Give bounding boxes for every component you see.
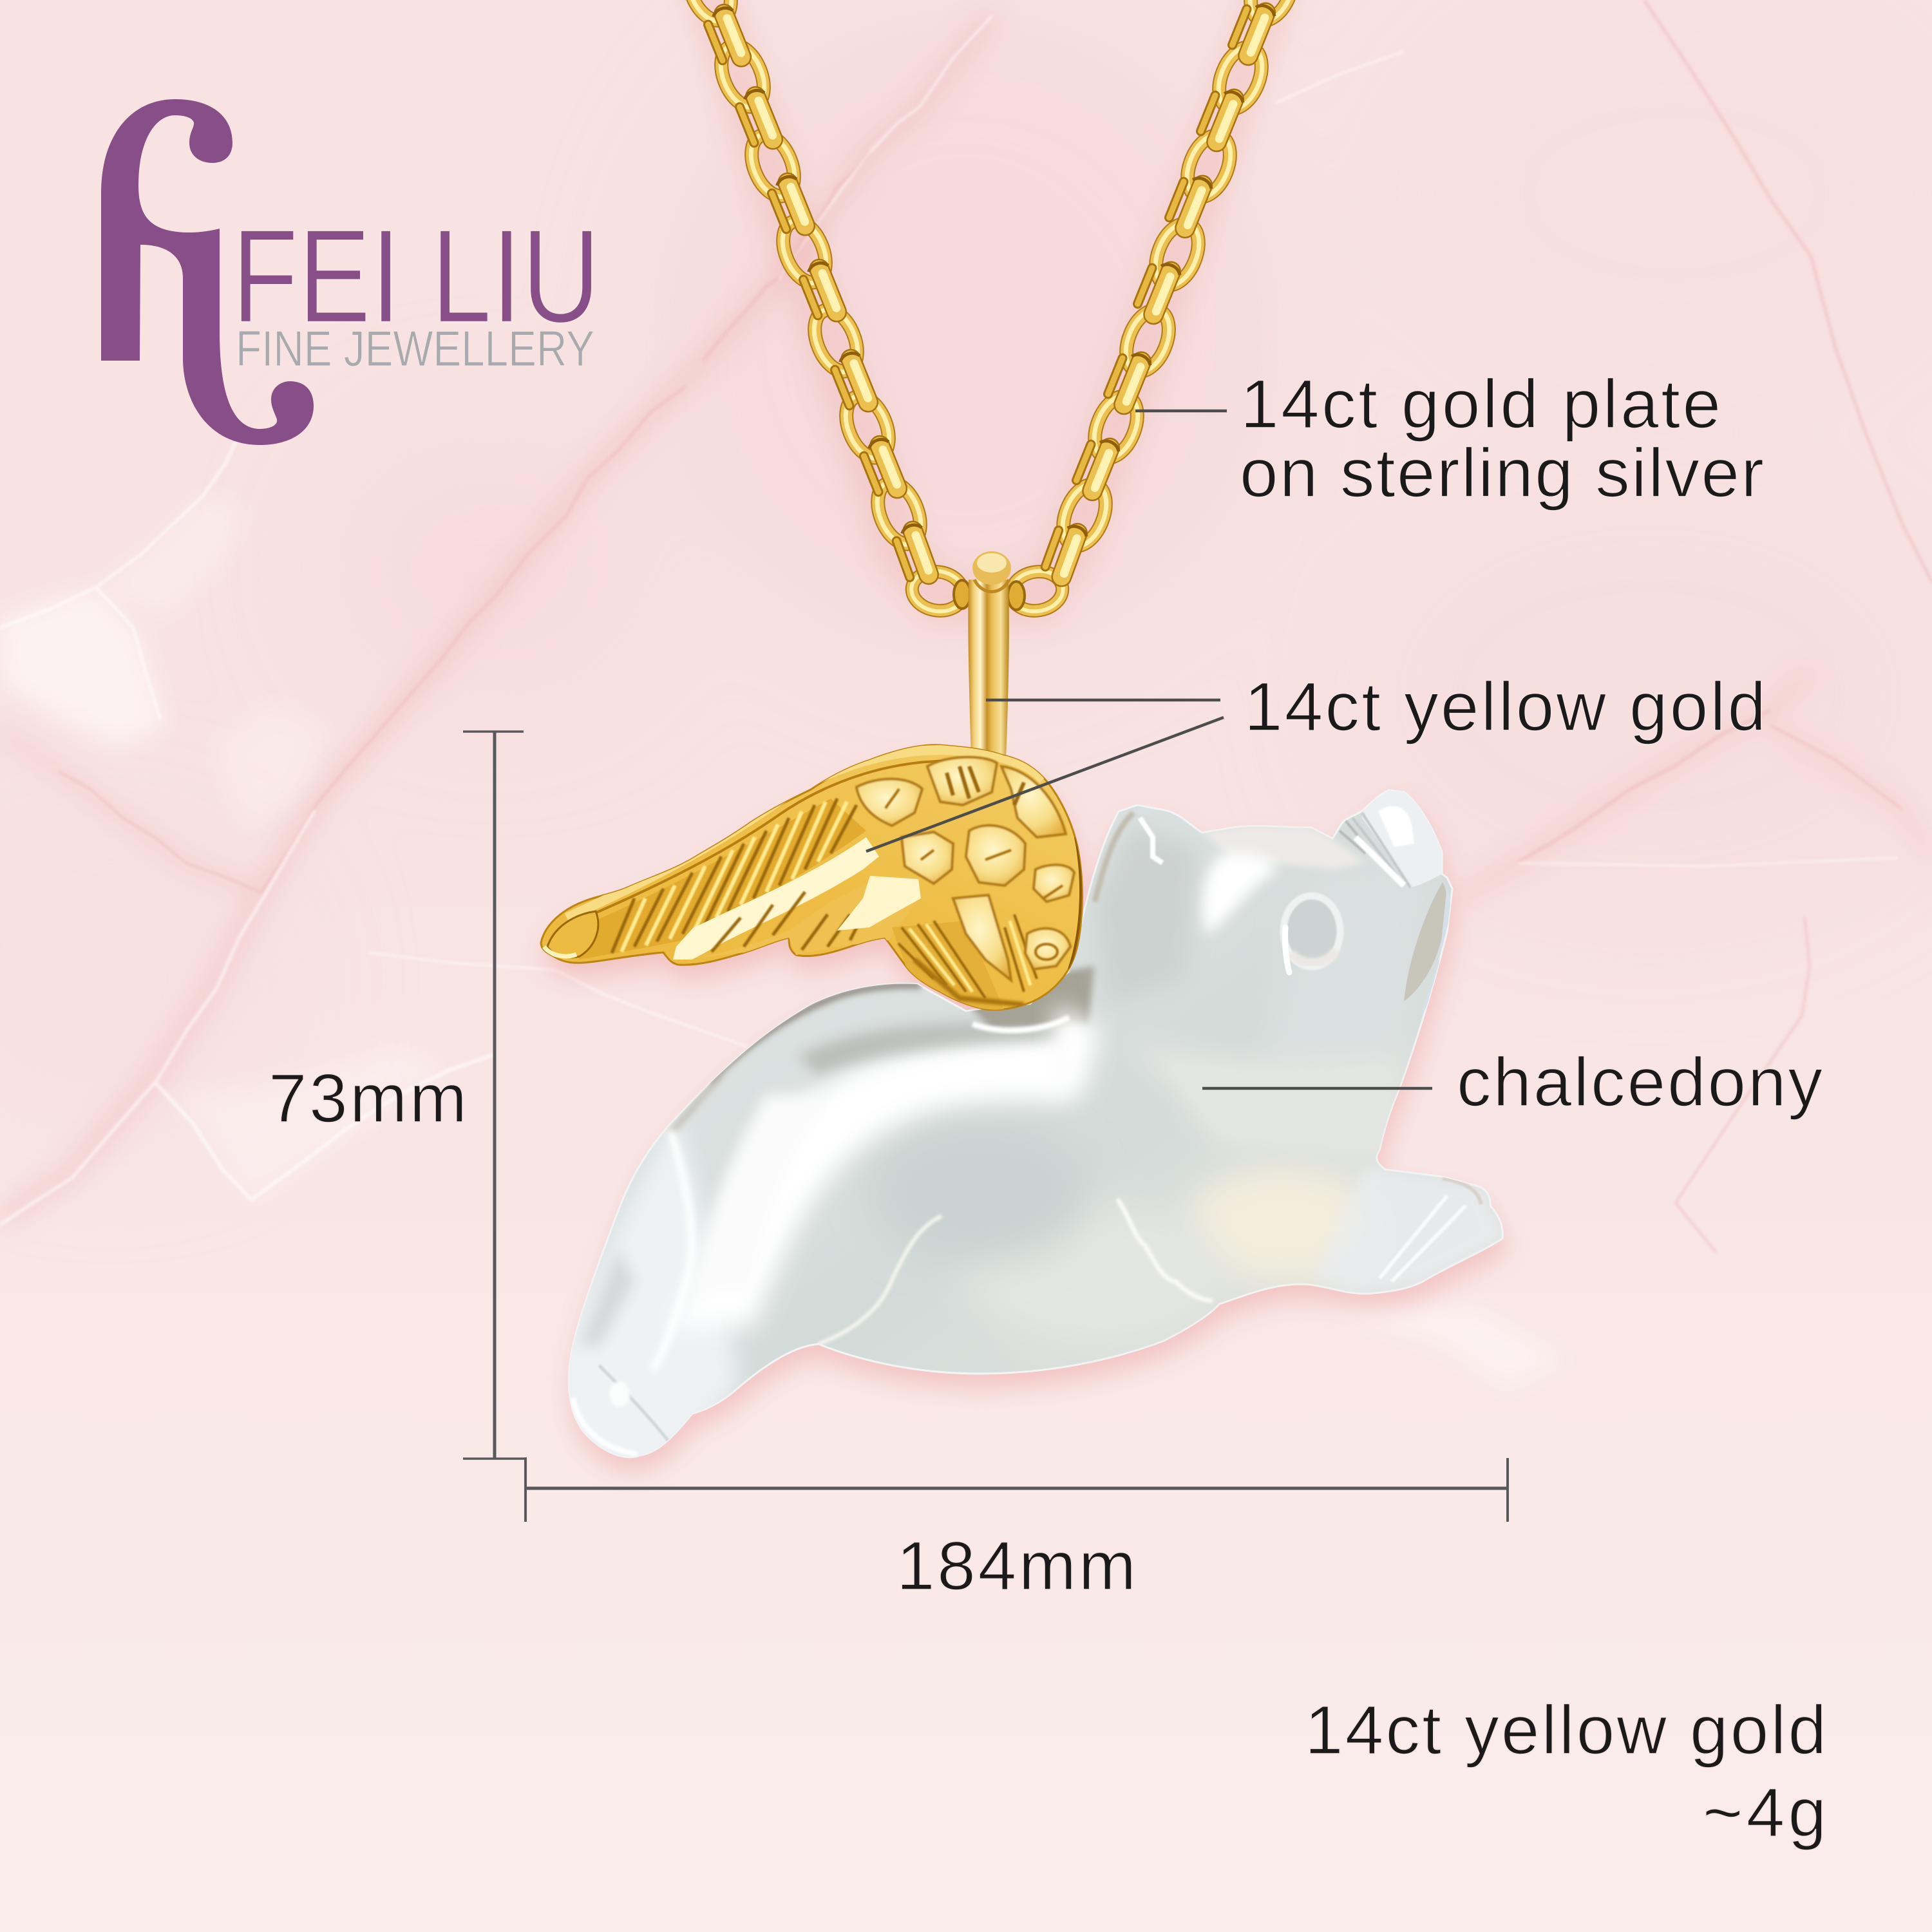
label: chain material [1240, 365, 1764, 511]
chain shadow [699, 0, 1282, 599]
label: wing material: 14ct yellow gold [1244, 668, 1766, 745]
label: chain material: 14ct gold plate [1240, 365, 1721, 442]
feather barbs [612, 799, 857, 953]
back grey band [799, 1021, 1063, 1075]
right ear sliver [1404, 882, 1447, 1001]
wing scale pads [857, 757, 1074, 980]
leader line: bail [986, 699, 1220, 701]
label: chain material: on sterling silver [1240, 434, 1764, 511]
rump crease [652, 1130, 692, 1370]
back highlight [670, 1030, 1069, 1327]
label: body material: chalcedony [1457, 1043, 1823, 1121]
logo monogram [101, 99, 314, 445]
height dimension bracket [463, 732, 526, 1459]
pink vein cracks [59, 0, 1932, 1253]
leader line: chalcedony [1202, 1087, 1432, 1090]
left ear [1095, 813, 1133, 902]
hook link beside bail, right [1008, 582, 1025, 610]
nose tip [1361, 790, 1442, 887]
left rump translucent area [570, 1133, 743, 1456]
eye ring [1283, 896, 1340, 967]
pendant: bail [968, 551, 1011, 759]
rear foot [599, 1365, 670, 1443]
wing tip curl [547, 911, 598, 958]
pad marks [886, 789, 1063, 960]
logo name: FEI LIU [232, 202, 600, 350]
lower textured feathers [892, 921, 1005, 1011]
necklace chain: 14ct gold plate [679, 0, 1302, 616]
under-wing shadow [953, 966, 1095, 1028]
warm lower belly tone [1185, 1166, 1378, 1282]
leader line: chain [1135, 410, 1227, 412]
specification: metal and weight: 14ct yellow gold [1305, 1691, 1826, 1768]
specification: metal and weight [1305, 1691, 1826, 1851]
pink vein bands [0, 16, 1932, 1220]
hook link beside bail, left [954, 580, 971, 609]
cream feather stripe [673, 837, 879, 960]
right chain strand [1007, 0, 1302, 616]
logo: Fei Liu Fine Jewellery [101, 99, 600, 445]
lower feathers [683, 876, 921, 960]
specification: metal and weight: ~4g [1703, 1774, 1826, 1851]
feather band [564, 799, 866, 960]
front foot [1314, 1166, 1504, 1294]
cheek highlight [1202, 853, 1278, 934]
wing rim [567, 750, 1043, 918]
leader line: wing [866, 717, 1224, 851]
forehead [1202, 826, 1365, 869]
pendant: gold wing [541, 745, 1083, 1011]
back edge [708, 985, 921, 1082]
left chain strand [679, 0, 971, 616]
pendant: chalcedony pig body [554, 790, 1504, 1475]
wing upper-feather texture [947, 766, 1024, 805]
logo tagline: FINE JEWELLERY [236, 320, 594, 377]
height label: 73mm [269, 1059, 467, 1137]
width label: 184mm [896, 1527, 1136, 1604]
white vein lines [0, 16, 1897, 1225]
shoulder highlight [1050, 1005, 1101, 1095]
leg seams [819, 1216, 942, 1344]
pendant shadow [544, 759, 1505, 1472]
head shading [1095, 824, 1198, 1005]
width dimension bracket [526, 1457, 1508, 1522]
